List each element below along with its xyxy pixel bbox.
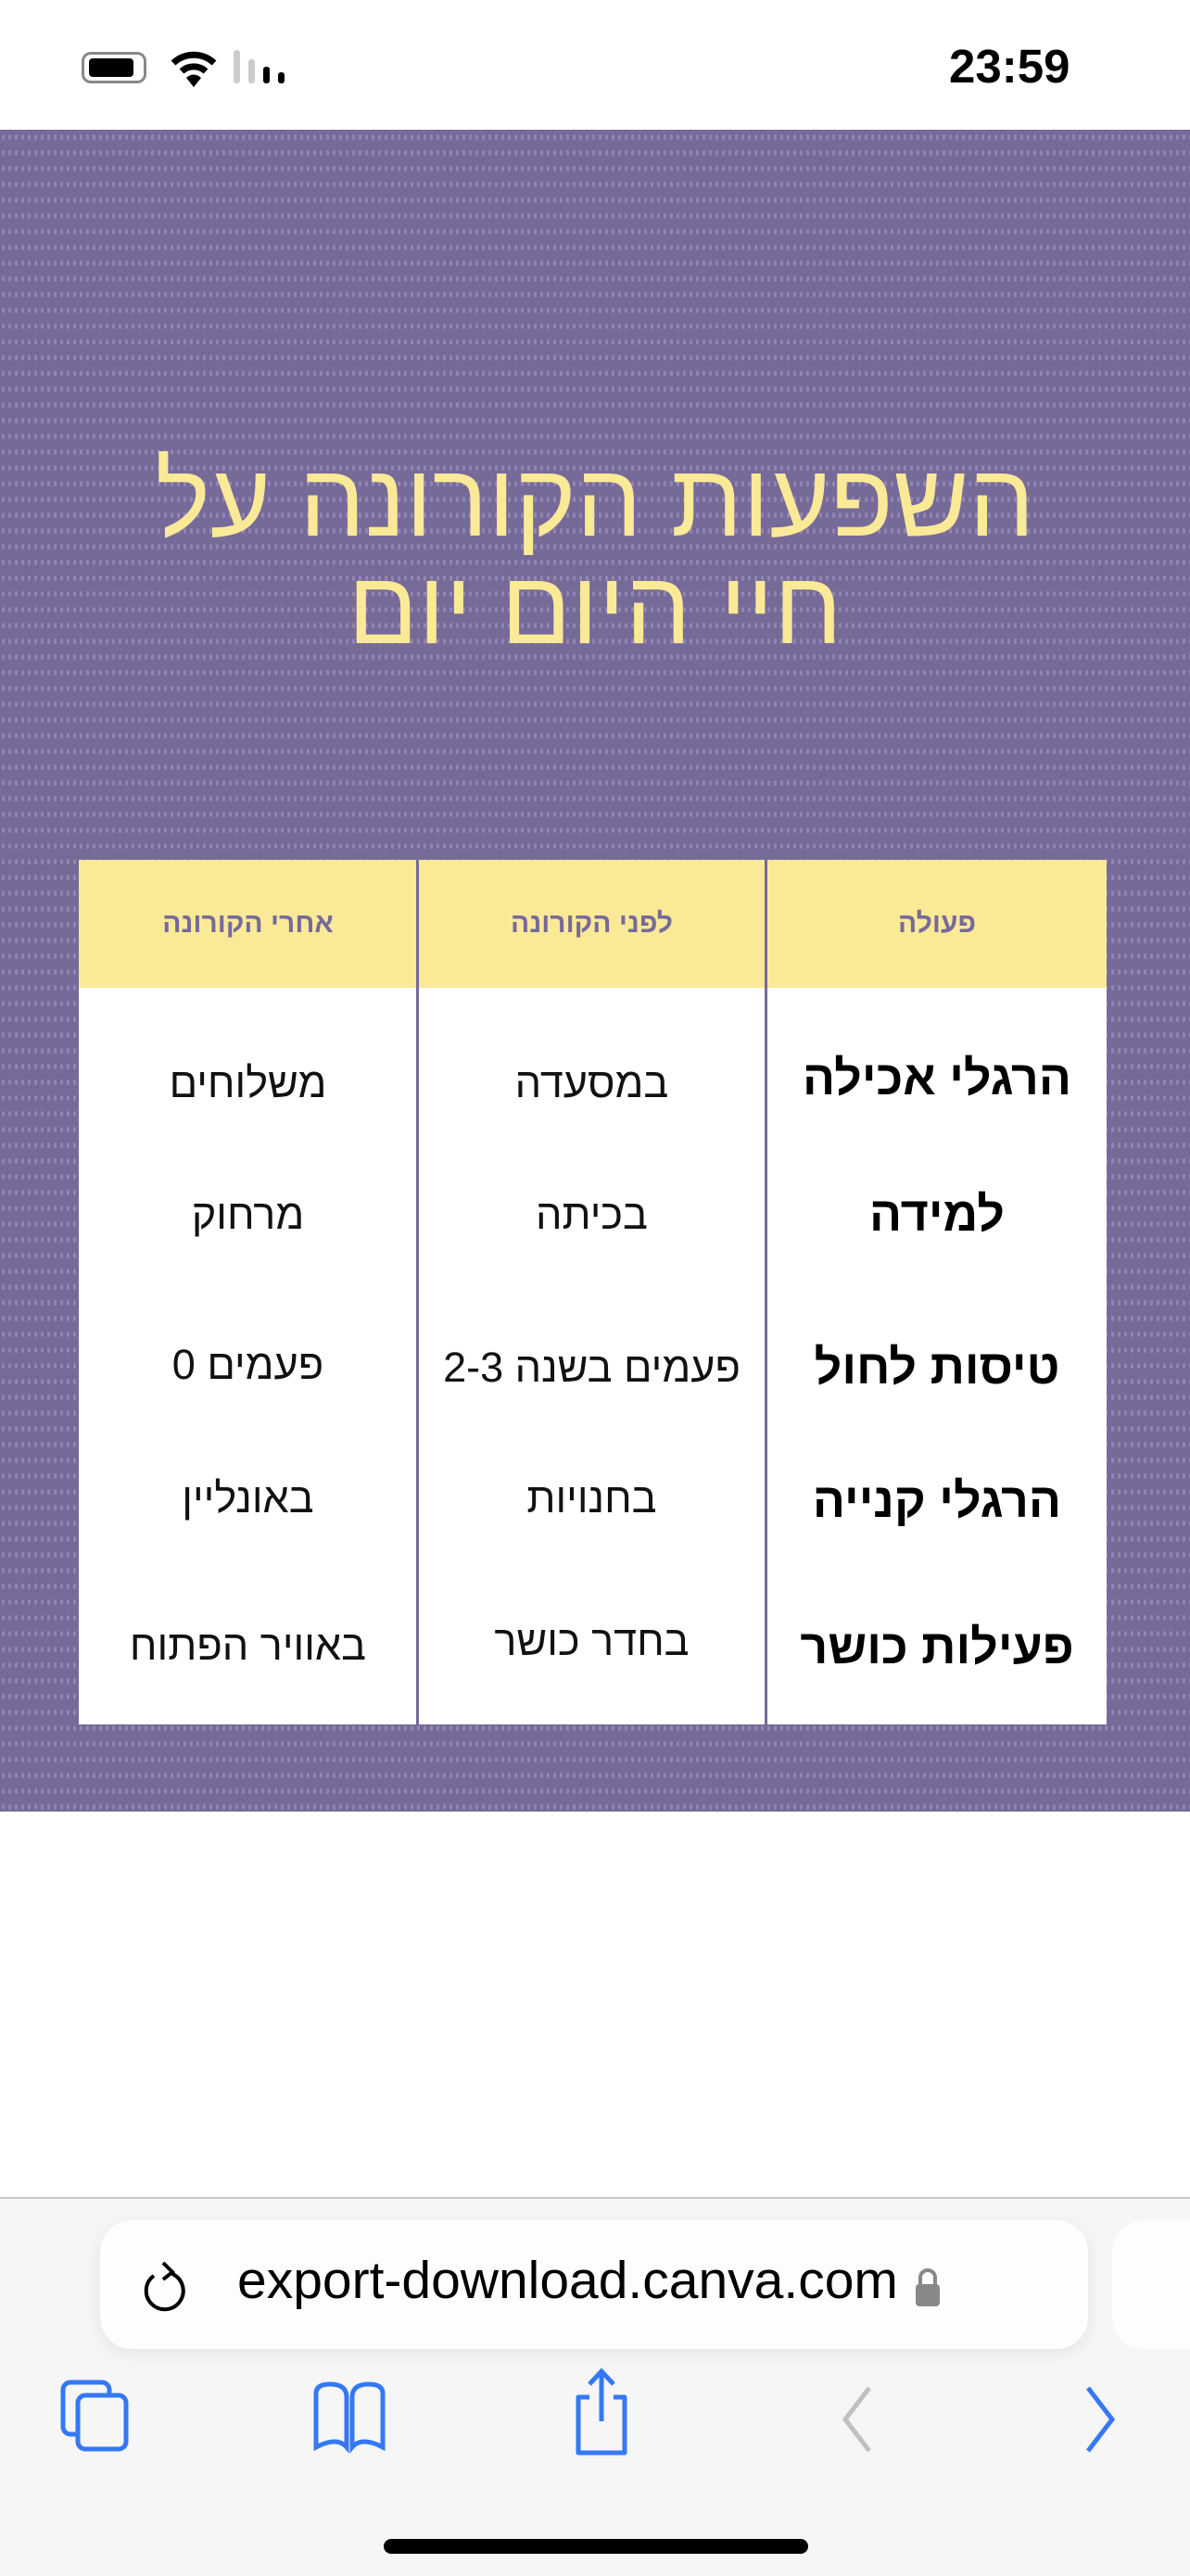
column: after corona: משלוחים: [170, 1059, 326, 1106]
column: action: פעולה: [898, 908, 976, 939]
column: before corona: פעמים בשנה 2-3: [443, 1344, 741, 1391]
url text: export-download.canva.com: [237, 2251, 898, 2310]
column: action: טיסות לחול: [815, 1341, 1059, 1395]
column: action: למידה: [869, 1188, 1005, 1242]
column: action: [800, 908, 1074, 1674]
icon: lock: [916, 2268, 940, 2306]
icon: battery: [82, 52, 146, 83]
column: before corona: בחדר כושר: [494, 1617, 690, 1664]
column: after corona: פעמים 0: [172, 1341, 323, 1388]
title: [155, 442, 1035, 665]
icon: wifi: [171, 52, 217, 87]
table: [79, 860, 1107, 1724]
icon: reload: [145, 2261, 185, 2311]
time: 23:59: [949, 40, 1070, 93]
icon: bookmarks: [313, 2381, 386, 2454]
column: after corona: אחרי הקורונה: [162, 908, 334, 939]
icon: signal bars: [234, 50, 285, 83]
icon: share: [576, 2368, 627, 2456]
icon: forward: [1086, 2387, 1116, 2452]
column: action: פעילות כושר: [800, 1621, 1074, 1674]
column: action: הרגלי קנייה: [813, 1474, 1061, 1528]
column: after corona: [130, 908, 366, 1669]
status bar: [0, 0, 1190, 130]
next tab pill: [1112, 2220, 1190, 2349]
icon: tabs: [61, 2380, 128, 2452]
column: after corona: באוויר הפתוח: [130, 1622, 366, 1669]
column: action: הרגלי אכילה: [803, 1052, 1071, 1105]
column: before corona: לפני הקורונה: [511, 908, 673, 939]
home indicator: [384, 2539, 808, 2554]
column: before corona: במסעדה: [515, 1059, 668, 1106]
header row background: [79, 860, 1107, 988]
column: before corona: בחנויות: [526, 1474, 657, 1522]
url pill: [100, 2220, 1088, 2349]
column: before corona: בכיתה: [536, 1191, 648, 1238]
column: before corona: [443, 908, 741, 1664]
browser toolbar: [0, 2197, 1190, 2576]
icon: back: [842, 2387, 871, 2452]
title: חיי היום יום: [348, 549, 842, 665]
column: after corona: מרחוק: [192, 1191, 304, 1238]
title: השפעות הקורונה על: [155, 442, 1035, 558]
panel: purple background: [0, 130, 1190, 1812]
column: after corona: באונליין: [182, 1474, 314, 1522]
